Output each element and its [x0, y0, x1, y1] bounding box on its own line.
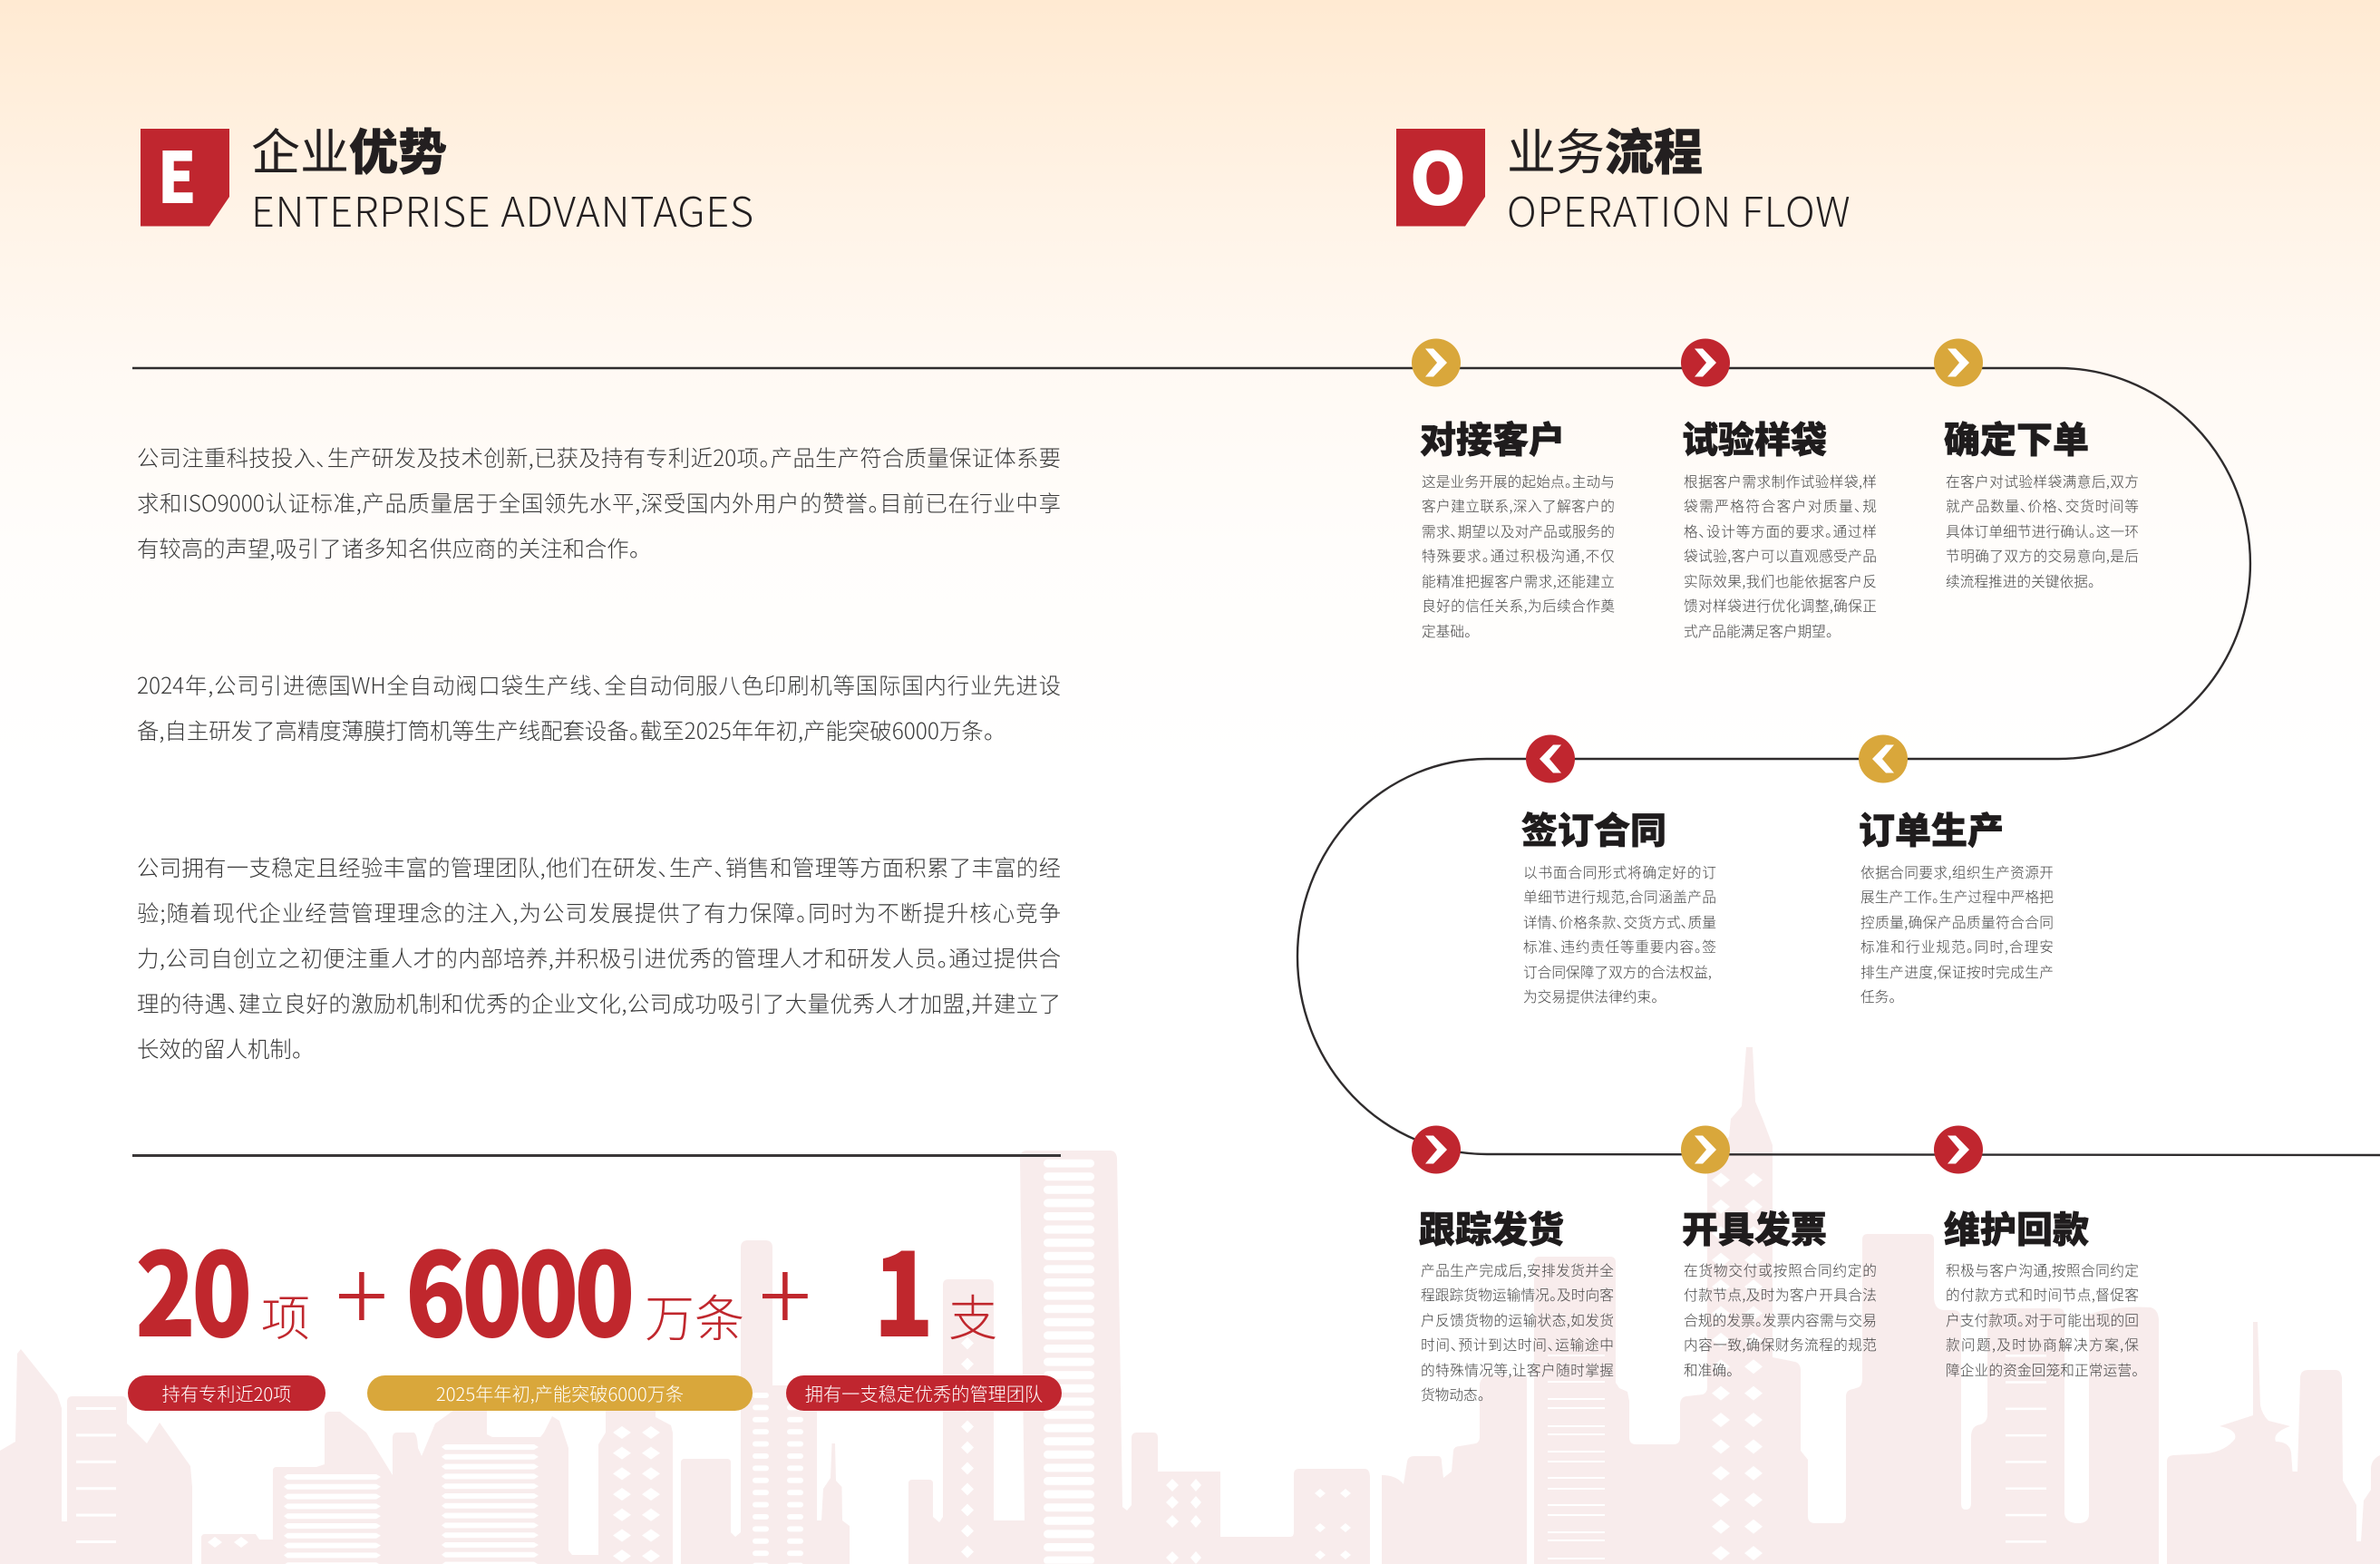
- step: 对接客户: [1420, 411, 1615, 641]
- step text: [1421, 1259, 1614, 1404]
- step title: 试验样袋: [1682, 411, 1827, 463]
- step text: 定基础。: [1422, 620, 1472, 641]
- step text: [1946, 471, 2139, 591]
- step text: 户支付款项。对于可能出现的回: [1946, 1309, 2139, 1330]
- step text: 需求、期望以及对产品或服务的: [1422, 520, 1615, 541]
- step: 订单生产: [1859, 801, 2054, 1006]
- step text: 为交易提供法律约束。: [1523, 986, 1658, 1006]
- step title: 签订合同: [1521, 801, 1666, 854]
- step text: 标准、违约责任等重要内容。签: [1523, 936, 1716, 957]
- step text: 依据合同要求,组织生产资源开: [1860, 861, 2054, 882]
- step text: 实际效果,我们也能依据客户反: [1684, 570, 1877, 591]
- pill: team: [786, 1375, 1062, 1411]
- marker 2: [1681, 339, 1730, 386]
- step text: 的付款方式和时间节点,督促客: [1946, 1284, 2139, 1305]
- step text: 展生产工作。生产过程中严格把: [1860, 886, 2054, 907]
- pill: capacity: [367, 1375, 753, 1411]
- step: 试验样袋: [1682, 411, 1877, 641]
- step text: 客户建立联系,深入了解客户的: [1422, 495, 1615, 516]
- step title: 跟踪发货: [1419, 1200, 1564, 1253]
- subheading: OPERATION FLOW: [1507, 180, 1851, 238]
- step text: 订合同保障了双方的合法权益,: [1523, 961, 1712, 982]
- step: 签订合同: [1521, 801, 1716, 1006]
- step text: 节明确了双方的交易意向,是后: [1946, 545, 2139, 566]
- step text: 和准确。: [1684, 1359, 1734, 1380]
- step title: 对接客户: [1420, 411, 1565, 463]
- step text: 控质量,确保产品质量符合合同: [1860, 911, 2054, 932]
- pill: patents: 持有专利近20项: [162, 1380, 291, 1406]
- step: 开具发票: [1682, 1200, 1877, 1380]
- step text: 的特殊情况等,让客户随时掌握: [1421, 1359, 1614, 1380]
- step text: 根据客户需求制作试验样袋,样: [1684, 471, 1877, 491]
- step text: [1422, 471, 1615, 641]
- step title: 维护回款: [1944, 1200, 2089, 1253]
- plus: +: [759, 1219, 811, 1361]
- step text: 积极与客户沟通,按照合同约定: [1946, 1259, 2139, 1280]
- stat: 20: 20: [135, 1203, 248, 1370]
- step title: 开具发票: [1682, 1200, 1827, 1253]
- step text: 时间、预计到达时间、运输途中: [1421, 1334, 1614, 1355]
- step text: 付款节点,及时为客户开具合法: [1684, 1284, 1877, 1305]
- text block: company paragraph 3: 理的待遇、建立良好的激励机制和优秀的企业文化,公司成功吸引了大量优秀人才加盟,并建立了: [137, 986, 1061, 1019]
- pill: patents: [128, 1375, 325, 1411]
- marker 7: [1681, 1126, 1730, 1173]
- step text: 程跟踪货物运输情况。及时向客: [1421, 1284, 1614, 1305]
- pill: team: 拥有一支稳定优秀的管理团队: [805, 1380, 1043, 1406]
- text block: company paragraph 2: 备,自主研发了高精度薄膜打筒机等生产线配套设备。截至2025年年初,产能突破6000万条。: [137, 714, 995, 745]
- step text: 就产品数量、价格、交货时间等: [1946, 495, 2139, 516]
- header: operation flow: [1396, 112, 1851, 238]
- step text: 标准和行业规范。同时,合理安: [1860, 936, 2054, 957]
- step text: [1684, 1259, 1877, 1380]
- step text: [1860, 861, 2054, 1006]
- text block: company paragraph 3: 公司拥有一支稳定且经验丰富的管理团队,他们在研发、生产、销售和管理等方面积累了丰富的经: [137, 850, 1061, 883]
- pill: capacity: 2025年年初,产能突破6000万条: [436, 1380, 684, 1406]
- text block: company paragraph 3: 验;随着现代企业经营管理理念的注入,为公司发展提供了有力保障。同时为不断提升核心竞争: [137, 896, 1061, 928]
- step text: 合规的发票。发票内容需与交易: [1684, 1309, 1877, 1330]
- stats row: [128, 1203, 1062, 1411]
- plus: +: [335, 1219, 388, 1361]
- rule: stats divider: [132, 1153, 1061, 1157]
- heading: 业务流程: 业务流程: [1507, 112, 1703, 184]
- step text: 在货物交付或按照合同约定的: [1684, 1259, 1877, 1280]
- step text: 障企业的资金回笼和正常运营。: [1946, 1359, 2139, 1380]
- unit: 支: 支: [948, 1278, 997, 1350]
- step text: 续流程推进的关键依据。: [1946, 570, 2095, 591]
- marker 6: [1412, 1126, 1461, 1173]
- step text: 排生产进度,保证按时完成生产: [1860, 961, 2054, 982]
- step text: 货物动态。: [1421, 1384, 1485, 1404]
- heading: 企业优势: 企业优势: [251, 112, 447, 184]
- text block: company paragraph 1: 有较高的声望,吸引了诸多知名供应商的关注和合作。: [137, 531, 640, 564]
- subheading: ENTERPRISE ADVANTAGES: [251, 180, 754, 238]
- step title: 订单生产: [1859, 801, 2004, 854]
- step text: 款问题,及时协商解决方案,保: [1946, 1334, 2139, 1355]
- marker 8: [1934, 1126, 1983, 1173]
- icon: E badge: [141, 129, 229, 227]
- step: 跟踪发货: [1419, 1200, 1614, 1404]
- step: 确定下单: [1944, 411, 2139, 591]
- header: enterprise advantages: [141, 112, 754, 238]
- step: 维护回款: [1944, 1200, 2139, 1380]
- step text: 在客户对试验样袋满意后,双方: [1946, 471, 2139, 491]
- step text: [1684, 471, 1877, 641]
- step text: 馈对样袋进行优化调整,确保正: [1684, 595, 1877, 616]
- icon: O badge: [1396, 129, 1485, 227]
- stat: 6000: 6000: [405, 1203, 630, 1370]
- step text: 产品生产完成后,安排发货并全: [1421, 1259, 1614, 1280]
- step text: 以书面合同形式将确定好的订: [1523, 861, 1716, 882]
- step text: 袋需严格符合客户对质量、规: [1684, 495, 1877, 516]
- step text: 格、设计等方面的要求。通过样: [1684, 520, 1877, 541]
- stat: 1: 1: [873, 1203, 929, 1370]
- text block: company paragraph 3: [137, 850, 1061, 1064]
- unit: 项: 项: [261, 1278, 310, 1350]
- text block: company paragraph 2: [137, 669, 1061, 745]
- step text: 内容一致,确保财务流程的规范: [1684, 1334, 1877, 1355]
- marker 3: [1934, 339, 1983, 386]
- step text: 户反馈货物的运输状态,如发货: [1421, 1309, 1614, 1330]
- marker 4: [1859, 734, 1908, 783]
- step text: 详情、价格条款、交货方式、质量: [1523, 911, 1716, 932]
- step text: [1946, 1259, 2139, 1380]
- step text: 能精准把握客户需求,还能建立: [1422, 570, 1615, 591]
- step text: 袋试验,客户可以直观感受产品: [1684, 545, 1877, 566]
- text block: company paragraph 1: [137, 441, 1061, 564]
- step text: 特殊要求。通过积极沟通,不仅: [1422, 545, 1615, 566]
- step text: 具体订单细节进行确认。这一环: [1946, 520, 2139, 541]
- step text: 单细节进行规范,合同涵盖产品: [1523, 886, 1716, 907]
- text block: company paragraph 3: 力,公司自创立之初便注重人才的内部培养,并积极引进优秀的管理人才和研发人员。通过提供合: [137, 941, 1061, 974]
- marker 1: [1412, 339, 1461, 386]
- step text: [1523, 861, 1716, 1006]
- text block: company paragraph 1: 公司注重科技投入、生产研发及技术创新,已获及持有专利近20项。产品生产符合质量保证体系要: [137, 441, 1061, 473]
- unit: 万条: 万条: [645, 1278, 744, 1351]
- text block: company paragraph 2: 2024年,公司引进德国WH全自动阀口袋生产线、全自动伺服八色印刷机等国际国内行业先进设: [137, 669, 1061, 700]
- step text: 良好的信任关系,为后续合作奠: [1422, 595, 1615, 616]
- step title: 确定下单: [1944, 411, 2089, 463]
- step text: 任务。: [1860, 986, 1896, 1006]
- step text: 式产品能满足客户期望。: [1684, 620, 1833, 641]
- step text: 这是业务开展的起始点。主动与: [1422, 471, 1615, 491]
- text block: company paragraph 3: 长效的留人机制。: [137, 1032, 303, 1064]
- text block: company paragraph 1: 求和ISO9000认证标准,产品质量居于全国领先水平,深受国内外用户的赞誉。目前已在行业中享: [137, 486, 1061, 519]
- marker 5: [1526, 734, 1575, 783]
